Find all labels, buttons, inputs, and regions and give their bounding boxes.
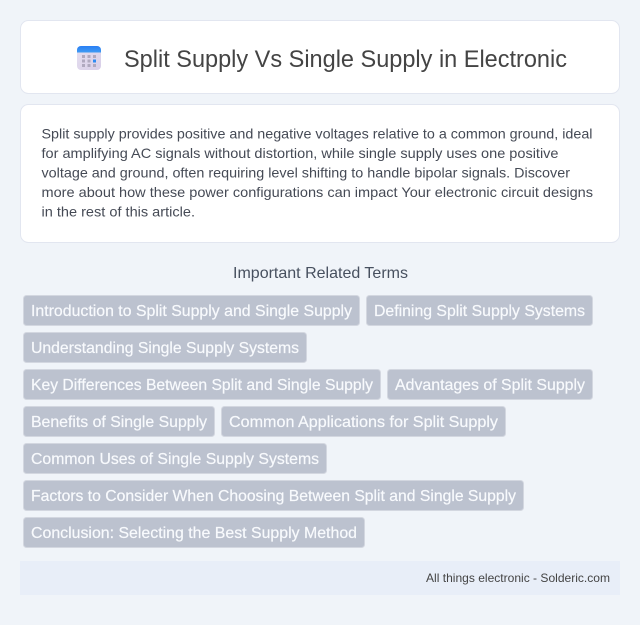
title: Split Supply Vs Single Supply in Electronic xyxy=(124,46,567,73)
tag: Defining Split Supply Systems xyxy=(374,303,585,320)
summary text: more about how these power configurations can impact Your electronic circuit designs xyxy=(42,184,593,200)
tag: Key Differences Between Split and Single Supply xyxy=(31,377,373,394)
tag xyxy=(24,332,306,362)
tag: Common Applications for Split Supply xyxy=(229,414,498,431)
tag: Advantages of Split Supply xyxy=(395,377,585,394)
footer text: All things electronic - Solderic.com xyxy=(426,571,610,585)
tag xyxy=(388,370,592,400)
tag xyxy=(366,296,592,326)
tag xyxy=(24,370,380,400)
tag xyxy=(24,444,326,474)
tag list xyxy=(24,296,592,548)
heading: related terms: Important Related Terms xyxy=(233,265,408,282)
summary text: in the rest of this article. xyxy=(42,204,195,220)
tag xyxy=(24,296,360,326)
panel: summary card xyxy=(20,104,620,242)
tag: Factors to Consider When Choosing Between Split and Single Supply xyxy=(31,488,516,505)
tag xyxy=(24,406,214,436)
tag: Conclusion: Selecting the Best Supply Method xyxy=(31,525,357,542)
icon: calendar xyxy=(77,46,101,70)
panel: title card xyxy=(20,20,620,94)
summary text: voltage and ground, often requiring level shifting to handle bipolar signals. Discover xyxy=(42,164,570,180)
summary text: Split supply provides positive and negative voltages relative to a common ground, ideal xyxy=(42,126,592,142)
tag: Benefits of Single Supply xyxy=(31,414,207,431)
tag: Understanding Single Supply Systems xyxy=(31,340,299,357)
tag: Introduction to Split Supply and Single Supply xyxy=(31,303,352,320)
summary text xyxy=(42,126,593,220)
tag: Common Uses of Single Supply Systems xyxy=(31,451,319,468)
tag xyxy=(24,518,364,548)
summary text: for amplifying AC signals without distortion, while single supply uses one positive xyxy=(42,145,559,161)
footer bar xyxy=(20,561,620,595)
tag xyxy=(222,406,506,436)
tag xyxy=(24,480,524,510)
